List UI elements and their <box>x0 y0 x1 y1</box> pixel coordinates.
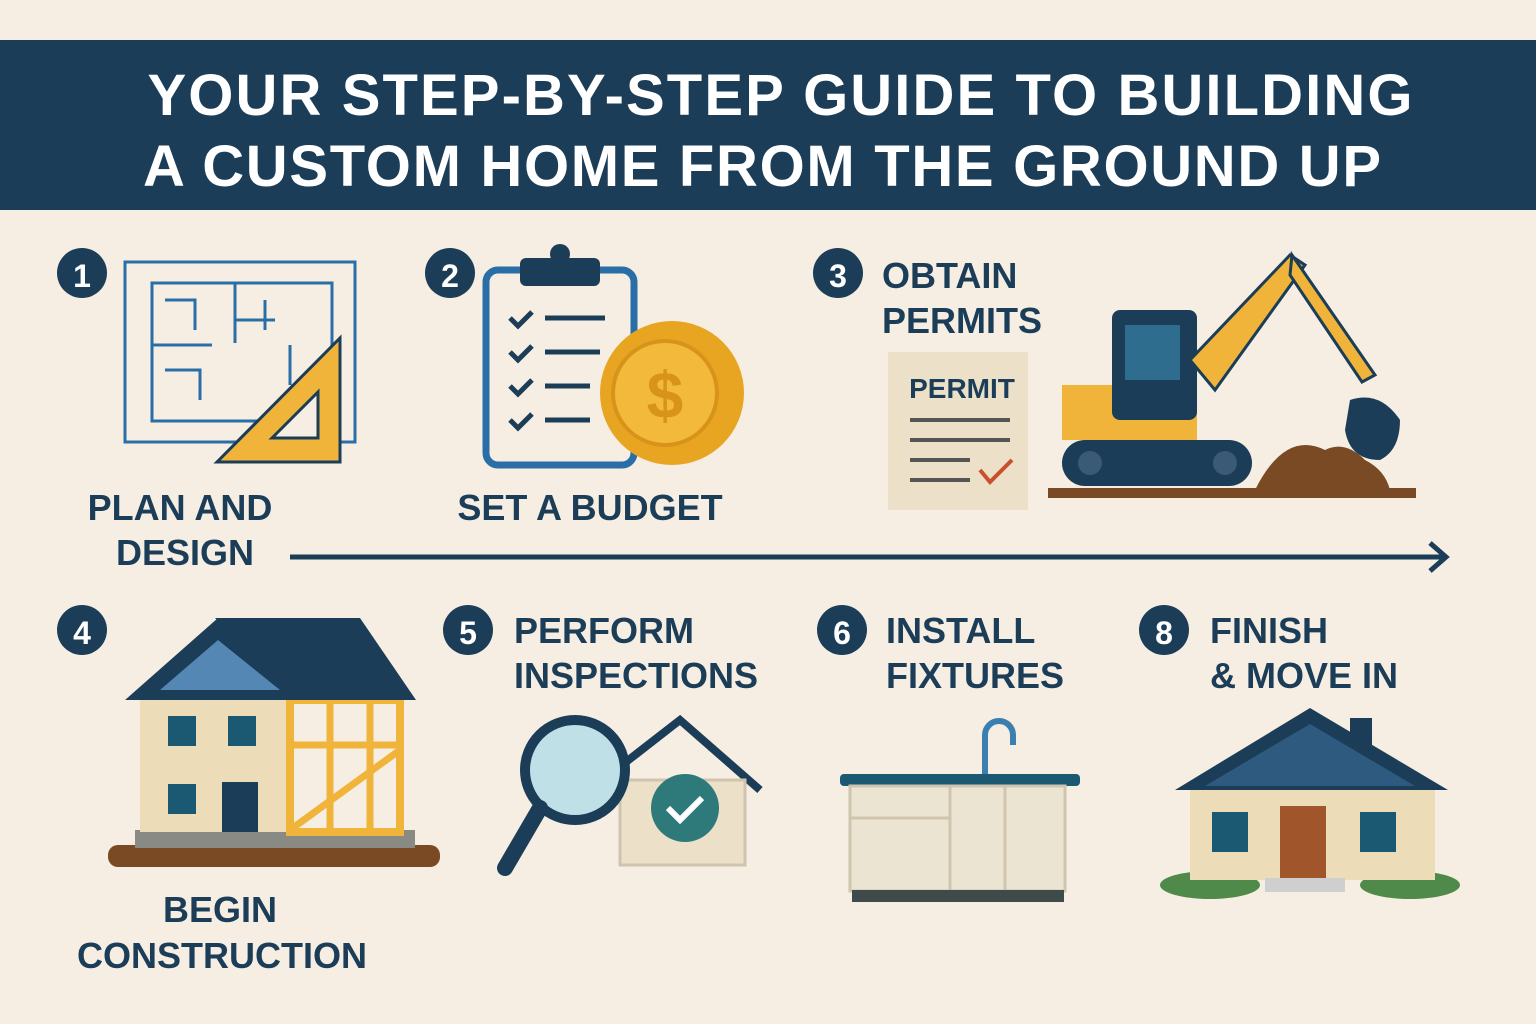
title banner <box>0 40 1536 210</box>
label: PLAN AND <box>88 487 272 528</box>
title banner: YOUR STEP-BY-STEP GUIDE TO BUILDING <box>148 63 1412 128</box>
step 3: obtain permits: PERMIT <box>909 373 1015 404</box>
step 8: finish and move in <box>1139 605 1460 899</box>
step 6: install fixtures <box>817 605 1080 902</box>
icon: kitchen cabinet <box>985 721 1013 775</box>
step 5: perform inspections <box>443 605 760 868</box>
icon: permit document <box>888 352 1028 510</box>
arrow: timeline <box>290 543 1446 571</box>
step 2: set a budget: $ <box>647 358 683 432</box>
step 3: obtain permits <box>813 248 1416 510</box>
icon: house with check and magnifier <box>590 720 760 790</box>
icon: house under construction <box>108 845 440 867</box>
step 4: begin construction: BEGIN <box>163 889 277 930</box>
step 2: set a budget: SET A BUDGET <box>457 487 723 528</box>
icon: finished house <box>1160 871 1260 899</box>
step 1: plan and design <box>57 248 355 573</box>
step 1: plan and design: 1 <box>73 258 91 294</box>
step 8: finish and move in: 8 <box>1155 615 1173 651</box>
step 6: install fixtures: INSTALL <box>886 610 1035 651</box>
step 4: begin construction: 4 <box>73 615 91 651</box>
step 4: begin construction: CONSTRUCTION <box>77 935 367 976</box>
step 5: perform inspections: INSPECTIONS <box>514 655 758 696</box>
icon: excavator <box>1048 488 1416 498</box>
step 2: set a budget: 2 <box>441 258 459 294</box>
step 5: perform inspections: 5 <box>459 615 477 651</box>
step 3: obtain permits: PERMITS <box>882 300 1042 341</box>
title banner: A CUSTOM HOME FROM THE GROUND UP <box>143 134 1381 199</box>
step 4: begin construction <box>57 605 440 976</box>
step 5: perform inspections: PERFORM <box>514 610 694 651</box>
step 3: obtain permits: OBTAIN <box>882 255 1017 296</box>
step 8: finish and move in: & MOVE IN <box>1210 655 1398 696</box>
step 6: install fixtures: 6 <box>833 615 851 651</box>
step 1: plan and design: DESIGN <box>116 532 254 573</box>
step 3: obtain permits: 3 <box>829 258 847 294</box>
step 6: install fixtures: FIXTURES <box>886 655 1064 696</box>
icon: blueprint <box>125 262 355 442</box>
icon: clipboard and coin <box>486 270 634 465</box>
step 8: finish and move in: FINISH <box>1210 610 1328 651</box>
step 2: set a budget <box>425 244 744 528</box>
